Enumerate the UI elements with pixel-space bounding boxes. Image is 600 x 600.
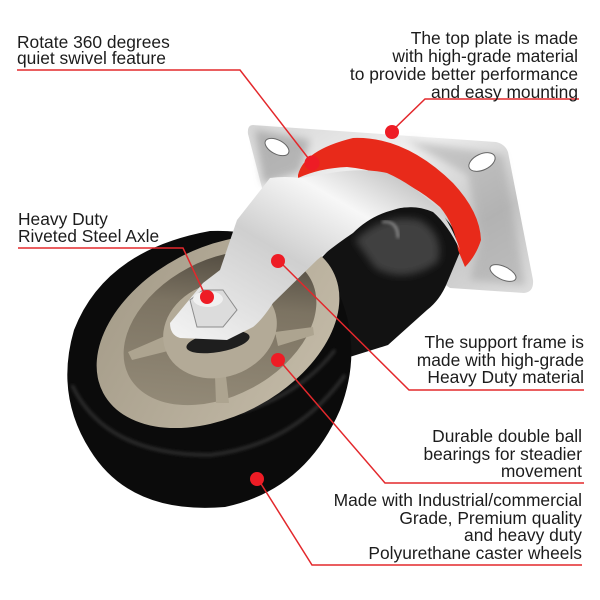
text: polyurethane wheels: [334, 490, 582, 563]
text: axle: [18, 209, 159, 246]
mounting holes: [262, 135, 518, 285]
text: top plate: [350, 28, 578, 102]
text: rotate 360: [17, 32, 170, 68]
text: polyurethane wheels: Made with Industrial/commercial: [334, 490, 582, 510]
text: top plate: to provide better performance: [350, 64, 578, 84]
text: top plate: The top plate is made: [411, 28, 578, 48]
text: top plate: and easy mounting: [431, 82, 578, 102]
text: polyurethane wheels: and heavy duty: [464, 525, 582, 545]
text: polyurethane wheels: Polyurethane caster wheels: [368, 543, 582, 563]
top plate: [248, 125, 533, 293]
text: axle: Riveted Steel Axle: [18, 226, 159, 246]
text: rotate 360: quiet swivel feature: [17, 48, 166, 68]
callout lines: [17, 70, 584, 565]
text: ball bearings: [423, 426, 582, 481]
callout dots: [200, 125, 399, 486]
wheel tyre: [64, 197, 372, 508]
text: top plate: with high-grade material: [392, 46, 578, 66]
text: ball bearings: movement: [501, 461, 582, 481]
text: support frame: made with high-grade: [417, 350, 584, 370]
text: support frame: The support frame is: [425, 332, 584, 352]
text: ball bearings: Durable double ball: [432, 426, 582, 446]
back of wheel: [300, 207, 460, 360]
text: polyurethane wheels: Grade, Premium quality: [399, 508, 582, 528]
text: support frame: Heavy Duty material: [427, 367, 584, 387]
swivel ring: [298, 138, 481, 267]
support frame arm: [170, 170, 460, 340]
text: support frame: [417, 332, 584, 387]
wheel hub: [64, 197, 372, 467]
axle bolt: [190, 290, 237, 327]
text: axle: Heavy Duty: [18, 209, 108, 229]
text: rotate 360: Rotate 360 degrees: [17, 32, 170, 52]
text: ball bearings: bearings for steadier: [423, 444, 582, 464]
